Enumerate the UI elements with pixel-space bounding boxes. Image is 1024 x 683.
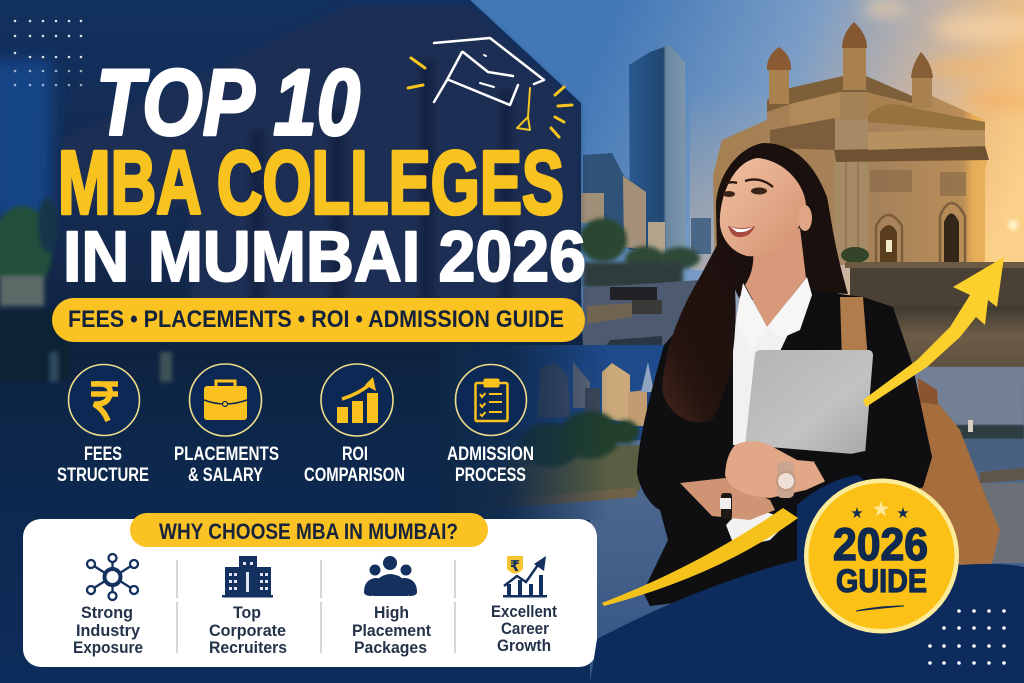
badge: 2026 guide: 2026: [833, 519, 928, 570]
item: excellent career growth: Career: [501, 620, 550, 638]
arrow: lower yellow swoosh: [602, 508, 798, 606]
feature: admission process: ADMISSION: [447, 444, 534, 465]
item: high placement packages: Placement: [352, 621, 431, 640]
title: [58, 50, 586, 297]
blue glow upper left: [0, 60, 52, 220]
archways: [880, 225, 897, 263]
feature: fees structure: FEES: [84, 444, 122, 465]
feature: placements and salary: & SALARY: [188, 465, 263, 486]
background: sunset sky: [440, 0, 1024, 360]
sleeve cuff over arm: [814, 440, 932, 512]
feature: fees structure: STRUCTURE: [57, 465, 149, 486]
seawall and railing: [845, 262, 1024, 268]
item: strong industry exposure: Industry: [76, 621, 141, 640]
distant faded skyline: [538, 362, 654, 426]
lawn and trees on the far shore: [467, 411, 640, 511]
item: excellent career growth: ₹: [510, 557, 520, 575]
badge stars: ★: [872, 497, 890, 521]
feature: placements and salary: [174, 364, 279, 486]
item: top corporate recruiters: Corporate: [209, 621, 286, 640]
feature: admission process: [447, 364, 534, 486]
feature: fees structure: [57, 364, 149, 486]
icon: graduation cap: [408, 38, 572, 137]
carved panels: [870, 170, 912, 192]
wristwatches: [720, 462, 795, 519]
feature: admission process: PROCESS: [455, 465, 526, 486]
subtitle pill: FEES • PLACEMENTS • ROI • ADMISSION GUIDE: [68, 306, 564, 333]
panel heading pill: [130, 513, 488, 547]
background: harbour water: [440, 305, 1024, 683]
item: excellent career growth: Growth: [497, 637, 551, 655]
long hair back: [716, 143, 847, 300]
item: strong industry exposure: [73, 554, 143, 657]
item: excellent career growth: Excellent: [491, 603, 557, 621]
neck: [745, 228, 806, 327]
backpack: [918, 378, 1000, 575]
item: high placement packages: [352, 556, 431, 657]
feature: ROI comparison: COMPARISON: [304, 465, 405, 486]
dot grid top left: [14, 20, 82, 86]
riverfront trees and promenade: [470, 218, 700, 440]
title: TOP 10: [96, 50, 360, 154]
panel heading pill: WHY CHOOSE MBA IN MUMBAI?: [159, 519, 458, 544]
badge: 2026 guide: [804, 478, 959, 634]
blazer: [637, 290, 932, 606]
right-side hair over blazer: [808, 197, 848, 294]
item: top corporate recruiters: Top: [233, 603, 261, 622]
strap: [840, 297, 868, 360]
badge stars: ★: [850, 504, 864, 522]
subtitle pill: [52, 298, 585, 342]
laptop: [745, 350, 873, 455]
icon: clipboard checklist: [476, 379, 508, 421]
forearms and hands: [680, 441, 828, 520]
dot grid bottom right: [928, 609, 1006, 665]
face: [720, 158, 806, 256]
left-side hair over shoulder: [662, 245, 752, 422]
navy panel background with dim campus building: [0, 0, 610, 683]
badge stars: ★: [896, 504, 910, 522]
item: excellent career growth: [491, 556, 557, 655]
badge stars: [850, 497, 910, 522]
item: strong industry exposure: Exposure: [73, 638, 143, 657]
Gateway of India monument: [713, 22, 1024, 306]
item: strong industry exposure: Strong: [81, 603, 133, 622]
item: high placement packages: Packages: [354, 638, 427, 657]
title: MBA COLLEGES: [58, 134, 564, 234]
gateway body: [713, 76, 988, 264]
student figure: [637, 143, 1000, 606]
white shirt: [733, 296, 790, 445]
title: IN MUMBAI 2026: [63, 218, 586, 297]
feature: ROI comparison: ROI: [342, 444, 368, 465]
feature: ROI comparison: [304, 364, 405, 486]
dim trees: [0, 197, 172, 382]
arrow: upper yellow growth arrow: [863, 257, 1004, 407]
ear: [798, 205, 812, 231]
icon: briefcase: [204, 381, 247, 420]
domed turrets: [767, 22, 933, 108]
bottom navy wave: [590, 475, 1024, 683]
icon: rupee: [91, 384, 118, 421]
item: top corporate recruiters: Recruiters: [209, 638, 287, 657]
badge: 2026 guide: GUIDE: [836, 563, 927, 599]
item: top corporate recruiters: [209, 556, 287, 657]
item: high placement packages: High: [374, 603, 409, 622]
eyes, brows and smile: [723, 179, 773, 237]
icon: growth bars: [337, 377, 378, 423]
collar: [736, 277, 812, 352]
skyline: glass towers: [580, 45, 711, 254]
feature: placements and salary: PLACEMENTS: [174, 444, 279, 465]
panel: why choose MBA in Mumbai: [23, 513, 597, 667]
